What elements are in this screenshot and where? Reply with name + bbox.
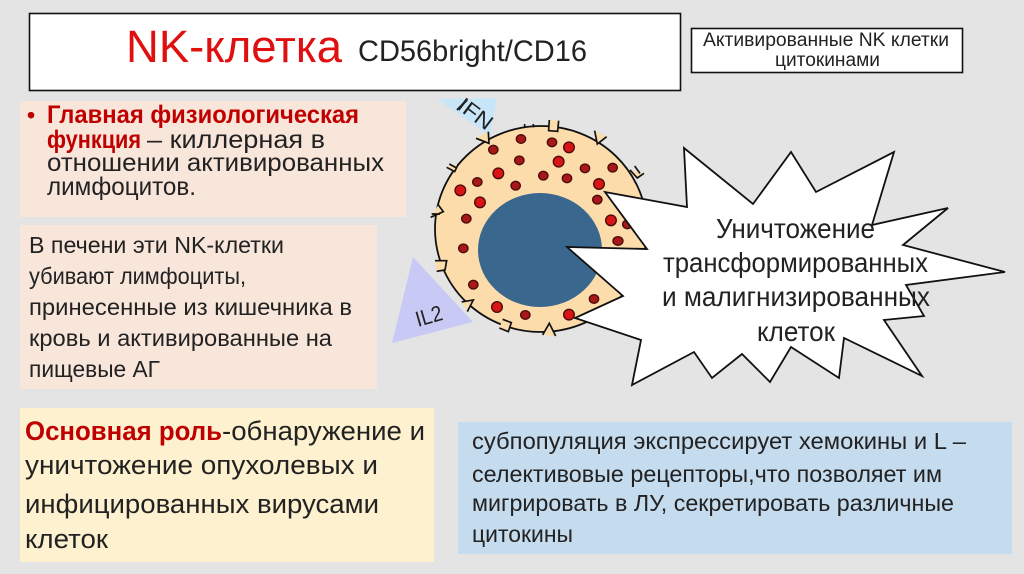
- panel: liver NK cells: кровь и активированные на: [29, 325, 332, 351]
- panel: main role: клеток: [25, 524, 108, 554]
- icon: IFN triangle: [437, 94, 497, 136]
- title box: CD56bright/CD16: [358, 35, 587, 68]
- panel: main role: -обнаружение и: [222, 416, 425, 446]
- activated NK cells label: цитокинами: [775, 50, 880, 71]
- nucleus: [478, 193, 602, 307]
- NK cell: [431, 120, 647, 336]
- icon: IFN triangle: IFN: [453, 94, 497, 135]
- panel: main role: [20, 408, 434, 562]
- panel: liver NK cells: В печени эти NK-клетки: [29, 232, 284, 258]
- panel: main role: инфицированных вирусами: [25, 489, 379, 519]
- panel: main physiological function: •: [27, 102, 35, 128]
- panel: main physiological function: – киллерная в: [147, 126, 325, 154]
- panel: subpopulation: селективовые рецепторы,что позволяет им: [472, 461, 942, 487]
- cell body: [435, 126, 647, 332]
- panel: main role: Основная роль: [25, 416, 222, 446]
- panel: main physiological function: Главная физиологическая: [47, 101, 359, 129]
- panel: liver NK cells: [20, 225, 377, 389]
- panel: main physiological function: [20, 101, 406, 217]
- panel: subpopulation: мигрировать в ЛУ, секретировать различные: [472, 490, 954, 516]
- activated NK cells label: [692, 28, 962, 72]
- starburst callout: клеток: [757, 316, 836, 347]
- panel: subpopulation: субпопуляция экспрессирует хемокины и L –: [472, 428, 966, 454]
- title box: [30, 14, 680, 90]
- panel: main physiological function: функция: [47, 126, 141, 154]
- starburst callout: и малигнизированных: [662, 281, 930, 312]
- starburst callout: [567, 148, 1005, 385]
- activated NK cells label: Активированные NK клетки: [703, 30, 949, 51]
- panel: main physiological function: отношении активированных: [47, 149, 385, 177]
- panel: main role: уничтожение опухолевых и: [25, 450, 378, 480]
- granules: [455, 135, 632, 320]
- starburst callout: Уничтожение: [716, 213, 875, 244]
- panel: subpopulation: [458, 422, 1012, 554]
- icon: IL2 triangle: IL2: [412, 300, 445, 332]
- membrane receptors: [431, 120, 644, 336]
- starburst callout: трансформированных: [663, 247, 928, 278]
- panel: liver NK cells: убивают лимфоциты,: [29, 263, 246, 289]
- panel: main physiological function: лимфоцитов.: [47, 173, 196, 201]
- panel: liver NK cells: принесенные из кишечника в: [29, 294, 352, 320]
- icon: IL2 triangle: [392, 257, 473, 343]
- title box: NK-клетка: [126, 21, 343, 72]
- panel: liver NK cells: пищевые АГ: [29, 356, 161, 382]
- panel: subpopulation: цитокины: [472, 521, 573, 547]
